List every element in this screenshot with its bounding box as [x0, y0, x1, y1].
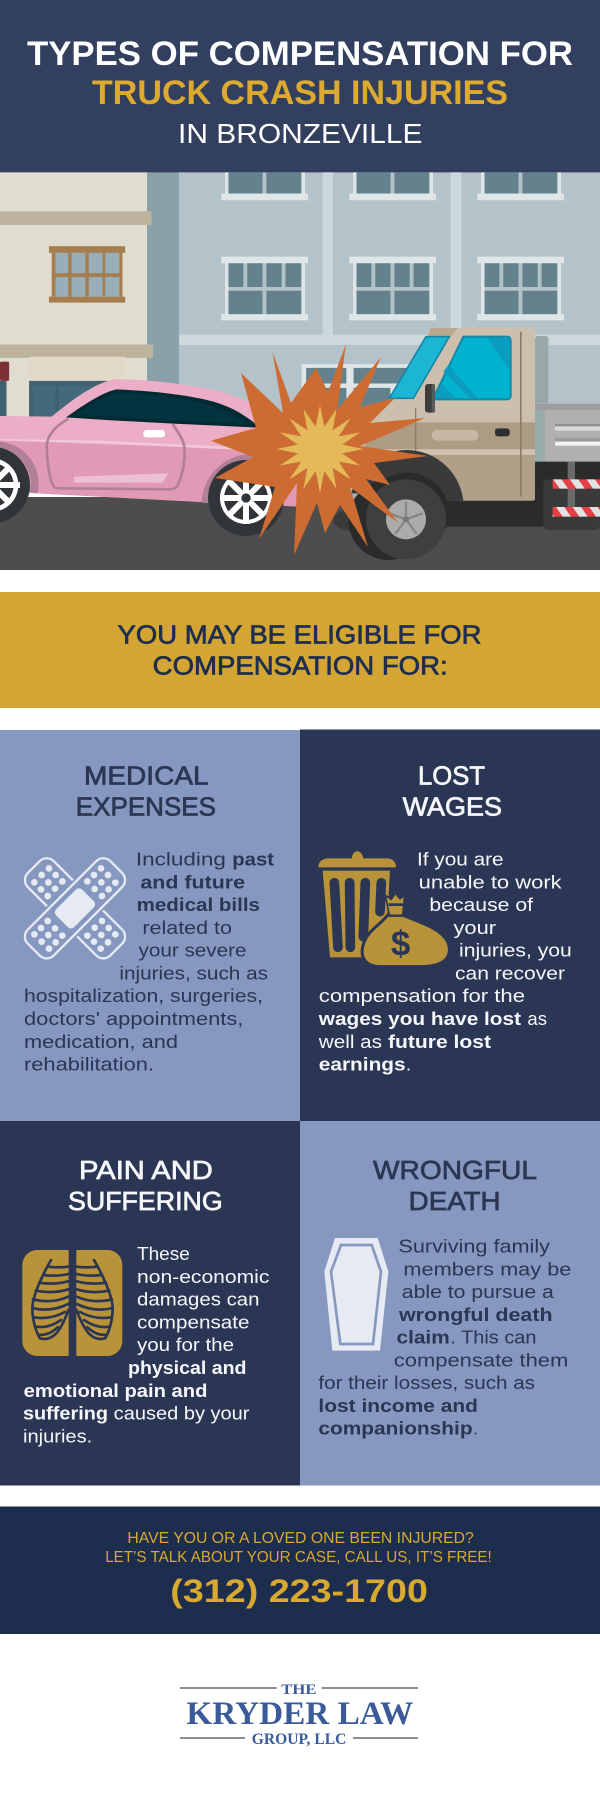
door outline — [47, 419, 185, 489]
heading: pain and suffering: SUFFERING — [68, 1186, 223, 1216]
icon: trash can and money bag — [318, 851, 449, 967]
panel: call to action — [0, 1506, 600, 1634]
logo: The Kryder Law Group — [180, 1682, 418, 1748]
body text: pain and suffering: physical and — [128, 1358, 246, 1378]
window column 3 — [477, 172, 564, 320]
body text: lost wages: future lost — [388, 1032, 491, 1052]
body text: pain and suffering: damages can — [137, 1290, 260, 1310]
body text: lost wages: If you are — [417, 850, 504, 870]
body text: lost wages: earnings — [319, 1054, 406, 1074]
body text: medical expenses: hospitalization, surgeries, — [24, 986, 263, 1006]
body text: medical expenses: past — [232, 850, 274, 870]
body text: wrongful death: Surviving family — [398, 1236, 550, 1256]
pink car — [0, 379, 300, 536]
body text: lost wages: well as — [318, 1032, 382, 1052]
heading: wrongful death: DEATH — [409, 1186, 501, 1216]
icon: rib cage — [22, 1249, 122, 1357]
icon: crossed bandages — [17, 850, 133, 967]
body text: pain and suffering: These — [137, 1244, 190, 1264]
body text: pain and suffering: caused by your — [114, 1404, 250, 1424]
heading: medical expenses: MEDICAL — [84, 760, 209, 790]
left ribs — [32, 1260, 68, 1339]
front wheel — [208, 460, 284, 536]
body text: wrongful death: wrongful death — [398, 1305, 553, 1325]
cab body — [360, 328, 535, 501]
body text: pain and suffering: suffering — [23, 1404, 108, 1424]
car window — [66, 389, 260, 428]
body text: lost wages: unable to work — [419, 872, 563, 892]
body text: medical expenses: related to — [142, 918, 232, 938]
heading: medical expenses: EXPENSES — [76, 792, 216, 822]
body text: wrongful death: . This can — [450, 1328, 536, 1348]
body text: pain and suffering — [23, 1244, 269, 1446]
body text: lost wages: your — [454, 918, 496, 938]
cta line 1: HAVE YOU OR A LOVED ONE BEEN INJURED? — [127, 1530, 474, 1547]
heading: pain and suffering: PAIN AND — [79, 1155, 213, 1185]
body text: lost wages: . — [406, 1054, 411, 1074]
heading: lost wages — [403, 760, 502, 822]
body text: pain and suffering: compensate — [137, 1312, 250, 1332]
body text: wrongful death: claim — [396, 1328, 450, 1348]
road — [0, 497, 600, 570]
body text: wrongful death: lost income and — [318, 1396, 478, 1416]
right ribs — [77, 1260, 113, 1339]
body text: wrongful death: companionship — [318, 1418, 473, 1438]
panel: pain and suffering — [0, 1121, 300, 1486]
title line 3: IN BRONZEVILLE — [178, 118, 422, 149]
body text: wrongful death: members may be — [403, 1259, 571, 1279]
logo: The Kryder Law Group: THE — [281, 1682, 316, 1698]
body text: medical expenses — [24, 850, 274, 1074]
body text: medical expenses: medical bills — [137, 895, 260, 915]
panel: medical expenses — [0, 730, 300, 1121]
body text: pain and suffering: emotional pain and — [24, 1381, 207, 1401]
body text: medical expenses: your severe — [138, 940, 246, 960]
body text: wrongful death — [318, 1236, 571, 1438]
heading: lost wages: LOST — [418, 760, 485, 790]
body text: lost wages: because of — [429, 895, 534, 915]
rear wheel — [0, 447, 30, 523]
wheel arch and wheel — [350, 450, 463, 513]
cta line 2: LET’S TALK ABOUT YOUR CASE, CALL US, IT’S FREE! — [105, 1549, 492, 1566]
icon: coffin — [324, 1238, 388, 1351]
panel: lost wages — [300, 730, 600, 1121]
title line 1: TYPES OF COMPENSATION FOR — [27, 35, 573, 73]
body text: lost wages — [318, 850, 572, 1074]
heading: medical expenses — [76, 760, 216, 822]
body text: lost wages: wages you have lost — [318, 1009, 521, 1029]
body text: medical expenses: Including — [136, 850, 226, 870]
body text: medical expenses: doctors' appointments, — [24, 1009, 243, 1029]
body text: pain and suffering: you for the — [137, 1335, 234, 1355]
body text: medical expenses: and future — [140, 872, 245, 892]
windows — [389, 337, 449, 398]
body text: lost wages: compensation for the — [319, 986, 525, 1006]
heading: pain and suffering — [68, 1155, 223, 1216]
banner line 1: YOU MAY BE ELIGIBLE FOR — [118, 620, 482, 650]
explosion — [211, 344, 428, 555]
logo: The Kryder Law Group: GROUP, LLC — [252, 1731, 346, 1748]
body text: medical expenses: rehabilitation. — [24, 1054, 154, 1074]
buildings background — [0, 172, 600, 525]
heading: wrongful death — [373, 1155, 537, 1216]
body text: wrongful death: for their losses, such as — [318, 1373, 535, 1393]
icon: trash can and money bag: $ — [391, 925, 410, 964]
body text: wrongful death: able to pursue a — [402, 1282, 555, 1302]
panel: title header — [0, 0, 600, 172]
heading: wrongful death: WRONGFUL — [373, 1155, 537, 1185]
window column 1 — [221, 172, 308, 320]
body text: lost wages: can recover — [455, 963, 565, 983]
body text: pain and suffering: non-economic — [137, 1267, 269, 1287]
window column 2 — [349, 172, 436, 320]
body text: pain and suffering: injuries. — [23, 1426, 92, 1446]
panel: wrongful death — [300, 1121, 600, 1486]
body text: wrongful death: . — [473, 1418, 478, 1438]
banner line 2: COMPENSATION FOR: — [153, 650, 448, 680]
lower window behind explosion — [302, 364, 416, 416]
title line 2: TRUCK CRASH INJURIES — [92, 74, 508, 112]
body text: lost wages: injuries, you — [459, 940, 572, 960]
truck — [333, 328, 600, 560]
panel: eligibility banner — [0, 592, 600, 708]
logo: The Kryder Law Group: KRYDER LAW — [186, 1696, 413, 1732]
body text: medical expenses: medication, and — [24, 1032, 178, 1052]
phone number: (312) 223-1700 — [170, 1573, 428, 1609]
body text: wrongful death: compensate them — [394, 1350, 568, 1370]
body text: medical expenses: injuries, such as — [119, 963, 268, 983]
heading: lost wages: WAGES — [403, 792, 502, 822]
illustration: truck crash street scene — [0, 172, 600, 570]
body text: lost wages: as — [527, 1009, 547, 1029]
